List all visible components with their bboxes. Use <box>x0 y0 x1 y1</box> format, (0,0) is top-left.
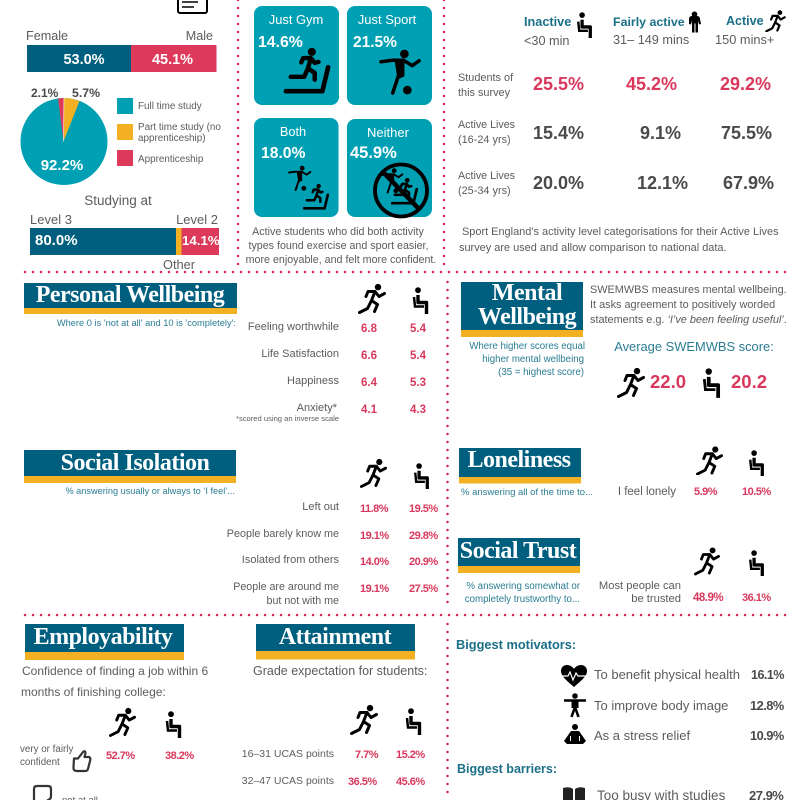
subheading: % answering all of the time to... <box>461 487 593 498</box>
icon: inactive sitter <box>750 450 762 476</box>
description <box>21 664 208 699</box>
icon: inactive sitter <box>167 711 180 738</box>
icon: active runner <box>360 284 384 312</box>
pie chart: study type: 2.1% <box>31 86 59 100</box>
card: just sport <box>347 6 432 105</box>
attainment rows: 36.5% <box>348 776 377 788</box>
wellbeing rows: Anxiety* <box>297 402 338 414</box>
row: active lives 16-24: 75.5% <box>721 123 772 143</box>
trust row: be trusted <box>631 593 681 605</box>
wellbeing rows: 5.4 <box>410 350 427 362</box>
heading <box>461 280 583 337</box>
wellbeing rows: Life Satisfaction <box>261 348 339 360</box>
column: inactive: Inactive <box>524 15 571 29</box>
loneliness row <box>618 486 771 498</box>
heading: Social Isolation <box>61 450 209 476</box>
wellbeing rows: 6.4 <box>361 377 378 389</box>
panel: employability <box>20 624 208 800</box>
panel: activity levels table <box>458 10 785 254</box>
column: inactive <box>524 12 590 48</box>
icon: inactive sitter <box>407 708 420 735</box>
heading: Wellbeing <box>478 304 577 330</box>
studying-at bar chart: 80.0% <box>35 232 78 249</box>
studying-at bar chart: Level 3 <box>30 212 72 227</box>
pie chart: study type <box>20 86 108 185</box>
card: just sport: Just Sport <box>358 12 417 27</box>
average score: Average SWEMWBS score: <box>614 339 774 354</box>
isolation rows: 27.5% <box>409 583 438 595</box>
pie chart: study type: 5.7% <box>72 86 100 100</box>
studying-at bar chart: Other <box>163 257 196 272</box>
panel: activity types <box>246 6 436 266</box>
isolation rows: 14.0% <box>360 556 389 568</box>
heading <box>256 624 415 660</box>
isolation rows: 11.8% <box>360 503 389 515</box>
panel: personal wellbeing <box>24 282 427 423</box>
studying-at bar chart: Level 2 <box>176 212 218 227</box>
SWEMWBS description <box>590 284 787 326</box>
wellbeing rows: 5.3 <box>410 377 426 389</box>
icon: active runner <box>697 446 722 474</box>
icon: inactive sitter <box>750 550 762 576</box>
pie legend: Full time study <box>138 101 202 112</box>
attainment rows <box>242 748 425 788</box>
icon: active runner <box>695 547 719 574</box>
isolation rows <box>227 501 438 607</box>
row: very or fairly confident: very or fairly <box>20 744 73 755</box>
pie chart: study type: 92.2% <box>41 157 83 174</box>
isolation rows: People are around me <box>233 581 339 593</box>
average score: 22.0 <box>650 371 686 392</box>
description: Grade expectation for students: <box>253 664 427 678</box>
heading <box>25 624 184 660</box>
isolation rows: Isolated from others <box>242 554 339 566</box>
attainment rows: 15.2% <box>396 749 425 761</box>
card: just gym: 14.6% <box>258 34 303 51</box>
attainment rows: 45.6% <box>396 776 425 788</box>
gender bar chart: 53.0% <box>63 52 105 68</box>
table note: survey are used and allow comparison to national data. <box>459 242 727 254</box>
SWEMWBS description: It asks agreement to positively worded <box>590 299 775 311</box>
attainment rows: 16–31 UCAS points <box>242 748 334 760</box>
panel: attainment <box>242 624 427 788</box>
isolation rows: 19.5% <box>409 503 438 515</box>
isolation rows: 19.1% <box>360 583 389 595</box>
SWEMWBS description: SWEMWBS measures mental wellbeing. <box>590 284 787 296</box>
icon: active runner <box>352 705 376 734</box>
motivator: stress relief: As a stress relief <box>594 728 690 743</box>
row: active lives 25-34: Active Lives <box>458 170 515 182</box>
card: just gym <box>254 6 339 105</box>
motivator: physical health <box>561 665 784 687</box>
wellbeing rows: 6.8 <box>361 323 378 335</box>
barrier: too busy with studies <box>563 787 784 800</box>
pie legend: apprenticeship) <box>138 133 206 144</box>
column: fairly active: 31– 149 mins <box>613 33 689 47</box>
loneliness row: 5.9% <box>694 486 718 498</box>
row: active lives 25-34: (25-34 yrs) <box>458 185 511 197</box>
motivator: physical health: To benefit physical health <box>594 667 740 682</box>
trust row <box>599 580 771 605</box>
isolation rows: but not with me <box>267 595 339 607</box>
row: active lives 16-24 <box>458 119 772 146</box>
subheading: Where higher scores equal <box>469 341 585 352</box>
description: months of finishing college: <box>21 685 166 699</box>
motivator: stress relief: 10.9% <box>750 728 785 743</box>
row: students of this survey: 25.5% <box>533 74 584 94</box>
wellbeing rows: *scored using an inverse scale <box>236 414 339 423</box>
subheading <box>465 581 581 605</box>
row: very or fairly confident: confident <box>20 757 60 768</box>
activity note <box>246 226 436 266</box>
heading: Loneliness <box>467 447 571 473</box>
loneliness row: 10.5% <box>742 486 771 498</box>
panel: demographics <box>20 0 221 272</box>
row: very or fairly confident: 38.2% <box>165 750 194 762</box>
card: neither <box>347 119 432 217</box>
subheading: completely trustworthy to... <box>465 594 580 605</box>
motivator: stress relief <box>564 724 785 745</box>
wellbeing rows: Feeling worthwhile <box>248 321 339 333</box>
trust row: 36.1% <box>742 592 771 604</box>
card: both: Both <box>280 124 306 139</box>
pie legend: Apprenticeship <box>138 154 204 165</box>
activity note: types found exercise and sport easier, <box>248 240 429 252</box>
wellbeing rows: 5.4 <box>410 323 427 335</box>
column: fairly active <box>613 12 701 47</box>
activity note: more enjoyable, and felt more confident. <box>246 254 436 266</box>
panel: mental wellbeing <box>461 280 787 398</box>
average score: 20.2 <box>731 371 767 392</box>
column: active: 150 mins+ <box>715 32 774 47</box>
heading <box>459 447 581 484</box>
row: active lives 25-34: 67.9% <box>723 173 774 193</box>
isolation rows: People barely know me <box>227 528 339 540</box>
heading: Social Trust <box>460 538 577 564</box>
wellbeing rows: Happiness <box>287 375 339 387</box>
card: neither: Neither <box>367 125 410 140</box>
subheading: % answering usually or always to ‘I feel’... <box>65 486 235 496</box>
isolation rows: 29.8% <box>409 530 438 542</box>
heading: Attainment <box>279 624 392 650</box>
row: students of this survey: 45.2% <box>626 74 677 94</box>
studying-at bar chart <box>30 193 220 272</box>
studying-at bar chart: 14.1% <box>182 233 220 248</box>
subheading <box>469 341 585 378</box>
gender bar chart: Female <box>26 29 68 43</box>
heading: biggest barriers: Biggest barriers: <box>457 762 557 776</box>
row: active lives 25-34: 12.1% <box>637 173 688 193</box>
card: just sport: 21.5% <box>353 34 397 51</box>
gender bar chart: Male <box>186 29 213 43</box>
motivator: body image: To improve body image <box>594 698 728 713</box>
motivator: body image: 12.8% <box>750 698 785 713</box>
column: active: Active <box>726 14 764 28</box>
isolation rows: Left out <box>302 501 339 513</box>
attainment rows: 32–47 UCAS points <box>242 775 334 787</box>
isolation rows: 19.1% <box>360 530 389 542</box>
card: both <box>254 118 338 217</box>
activity note: Active students who did both activity <box>252 226 424 238</box>
icon: active runner <box>110 708 135 736</box>
row: active lives 16-24: (16-24 yrs) <box>458 134 511 146</box>
wellbeing rows <box>236 321 427 423</box>
heading: Employability <box>34 624 173 650</box>
card: neither: 45.9% <box>350 144 397 162</box>
gender bar chart: 45.1% <box>152 52 193 68</box>
row: very or fairly confident: 52.7% <box>106 750 135 762</box>
card: both: 18.0% <box>261 145 306 162</box>
wellbeing rows: 4.3 <box>410 404 426 416</box>
wellbeing rows: 4.1 <box>361 404 378 416</box>
panel: social isolation <box>24 450 438 607</box>
attainment rows: 7.7% <box>355 749 379 761</box>
motivator: body image <box>564 693 785 717</box>
row: active lives 16-24: 15.4% <box>533 123 584 143</box>
row: students of this survey: 29.2% <box>720 74 771 94</box>
subheading: % answering somewhat or <box>466 581 581 592</box>
row: students of this survey <box>458 72 771 99</box>
row: students of this survey: Students of <box>458 72 514 84</box>
row: active lives 16-24: 9.1% <box>640 123 681 143</box>
subheading: Where 0 is 'not at all' and 10 is 'completely': <box>57 318 236 328</box>
column: active <box>715 10 785 47</box>
icon: document <box>178 0 207 13</box>
description: Confidence of finding a job within 6 <box>22 664 208 678</box>
icon: active runner <box>361 459 386 486</box>
motivator: physical health: 16.1% <box>751 668 784 682</box>
heading: Personal Wellbeing <box>36 282 225 308</box>
pie legend: Part time study (no <box>138 122 221 133</box>
card: just gym: Just Gym <box>269 12 323 27</box>
gender bar chart <box>26 29 216 72</box>
row: students of this survey: this survey <box>458 87 511 99</box>
icon: inactive sitter <box>415 463 427 489</box>
heading: biggest motivators: Biggest motivators: <box>456 637 576 652</box>
isolation rows: 20.9% <box>409 556 438 568</box>
panel: social trust <box>458 538 771 605</box>
panel: loneliness <box>459 446 771 498</box>
row: very or fairly confident <box>20 744 194 771</box>
row: not at all confident <box>34 786 98 800</box>
icon: inactive sitter <box>414 287 426 314</box>
column: inactive: <30 min <box>524 34 570 48</box>
studying-at bar chart: Studying at <box>84 193 152 208</box>
loneliness row: I feel lonely <box>618 486 676 498</box>
column: fairly active: Fairly active <box>613 15 685 29</box>
average score <box>614 339 774 398</box>
pie legend <box>117 98 221 166</box>
subheading: (35 = highest score) <box>498 367 584 378</box>
wellbeing rows: 6.6 <box>361 350 377 362</box>
SWEMWBS description: statements e.g. ‘I’ve been feeling useful’. <box>590 314 787 326</box>
table note: Sport England’s activity level categorisations for their Active Lives <box>462 226 779 238</box>
trust row: 48.9% <box>693 592 723 604</box>
subheading: higher mental wellbeing <box>482 354 584 365</box>
trust row: Most people can <box>599 580 681 592</box>
row: active lives 25-34 <box>458 170 774 197</box>
row: active lives 16-24: Active Lives <box>458 119 515 131</box>
heading: Mental <box>492 280 563 306</box>
table note <box>459 226 779 254</box>
panel: motivators and barriers <box>456 637 785 800</box>
heading <box>24 450 236 483</box>
row: active lives 25-34: 20.0% <box>533 173 584 193</box>
